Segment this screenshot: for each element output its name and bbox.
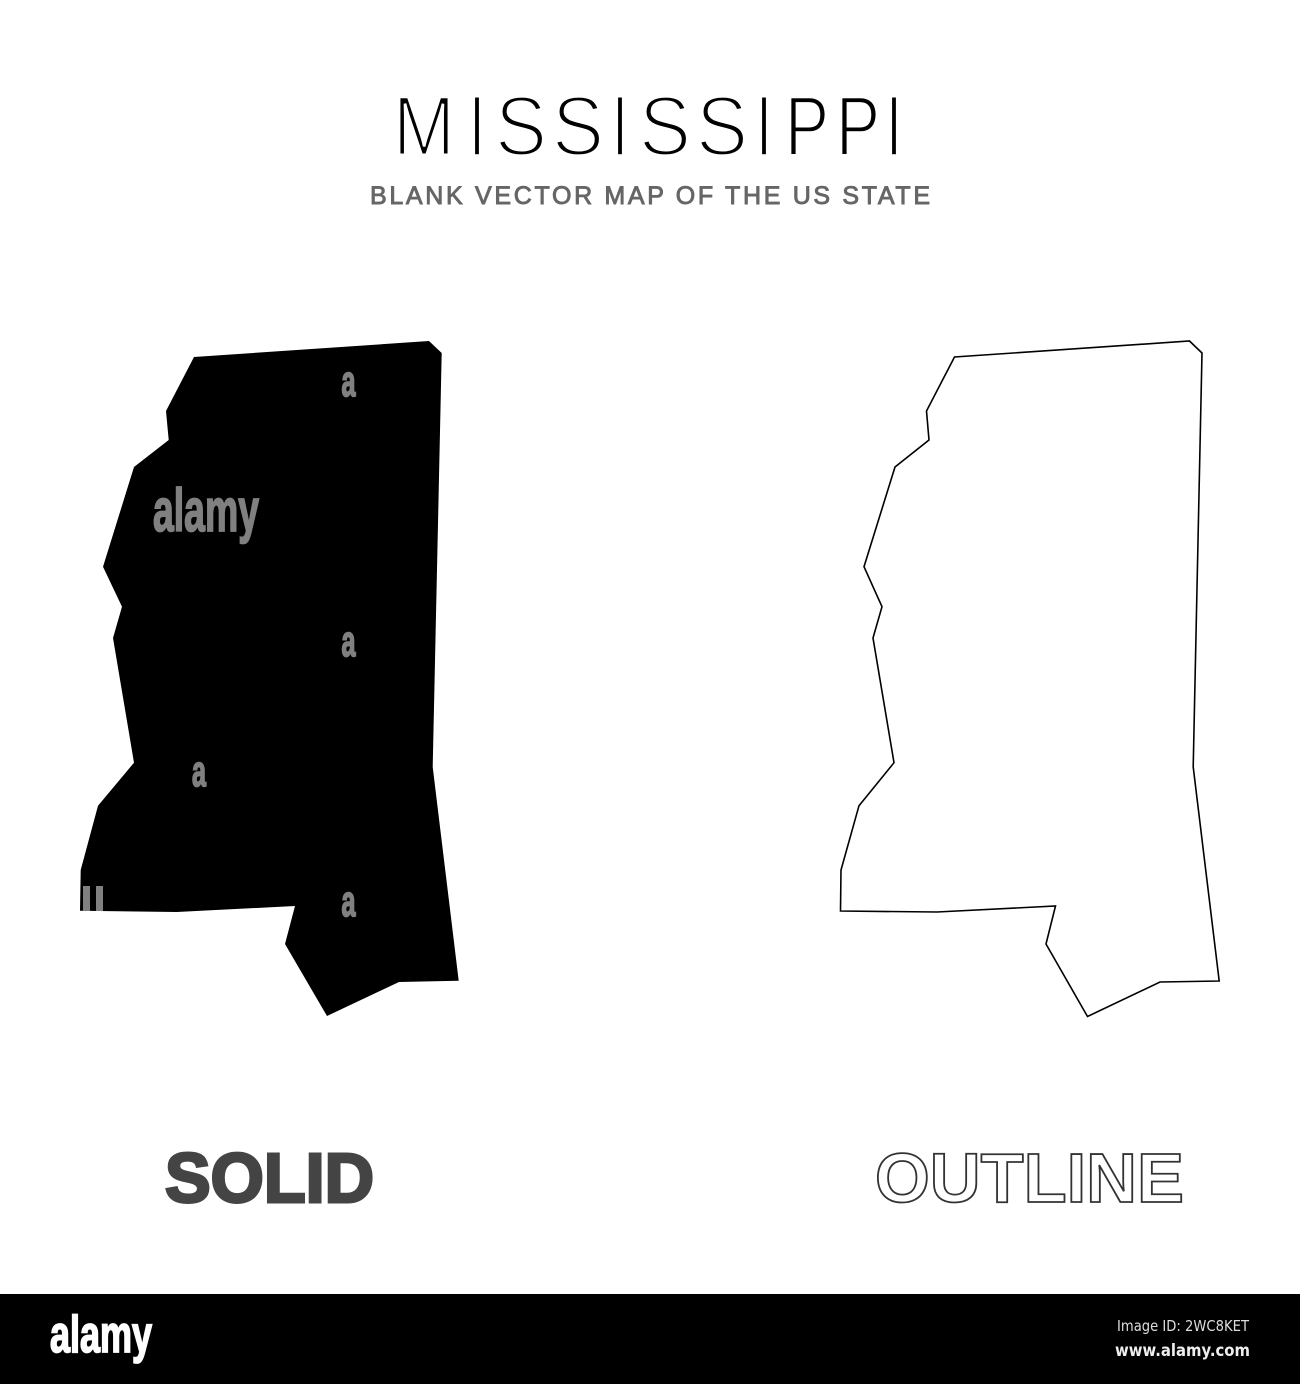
label: outline: OUTLINE — [875, 1139, 1184, 1217]
title: I — [757, 79, 771, 173]
subtitle: BLANK VECTOR MAP OF THE US STATE — [370, 182, 930, 210]
footer bar — [0, 1294, 1300, 1384]
title: P — [785, 79, 829, 173]
title: M — [393, 79, 455, 173]
solid map of Mississippi — [80, 341, 459, 1016]
footer logo: alamy: alamy — [50, 1306, 152, 1364]
watermark: letter a, bottom: a — [342, 877, 356, 926]
watermark: letter a, top: a — [342, 357, 356, 406]
title — [393, 79, 901, 173]
title: I — [470, 79, 484, 173]
title: I — [887, 79, 901, 173]
title: P — [836, 79, 880, 173]
title: I — [613, 79, 627, 173]
title: S — [696, 79, 748, 173]
watermark: letter a, lower left: a — [192, 747, 206, 796]
title: S — [552, 79, 604, 173]
footer: website: www.alamy.com — [1115, 1341, 1250, 1361]
title: S — [639, 79, 691, 173]
footer: image id: Image ID: 2WC8KET — [1117, 1317, 1250, 1335]
watermark: alamy on solid map: alamy — [153, 477, 259, 544]
title: S — [495, 79, 547, 173]
outline map of Mississippi — [840, 341, 1219, 1016]
label: solid: SOLID — [165, 1139, 374, 1217]
watermark: letter a, middle: a — [342, 617, 356, 666]
watermark: bars at map edge — [83, 886, 103, 911]
